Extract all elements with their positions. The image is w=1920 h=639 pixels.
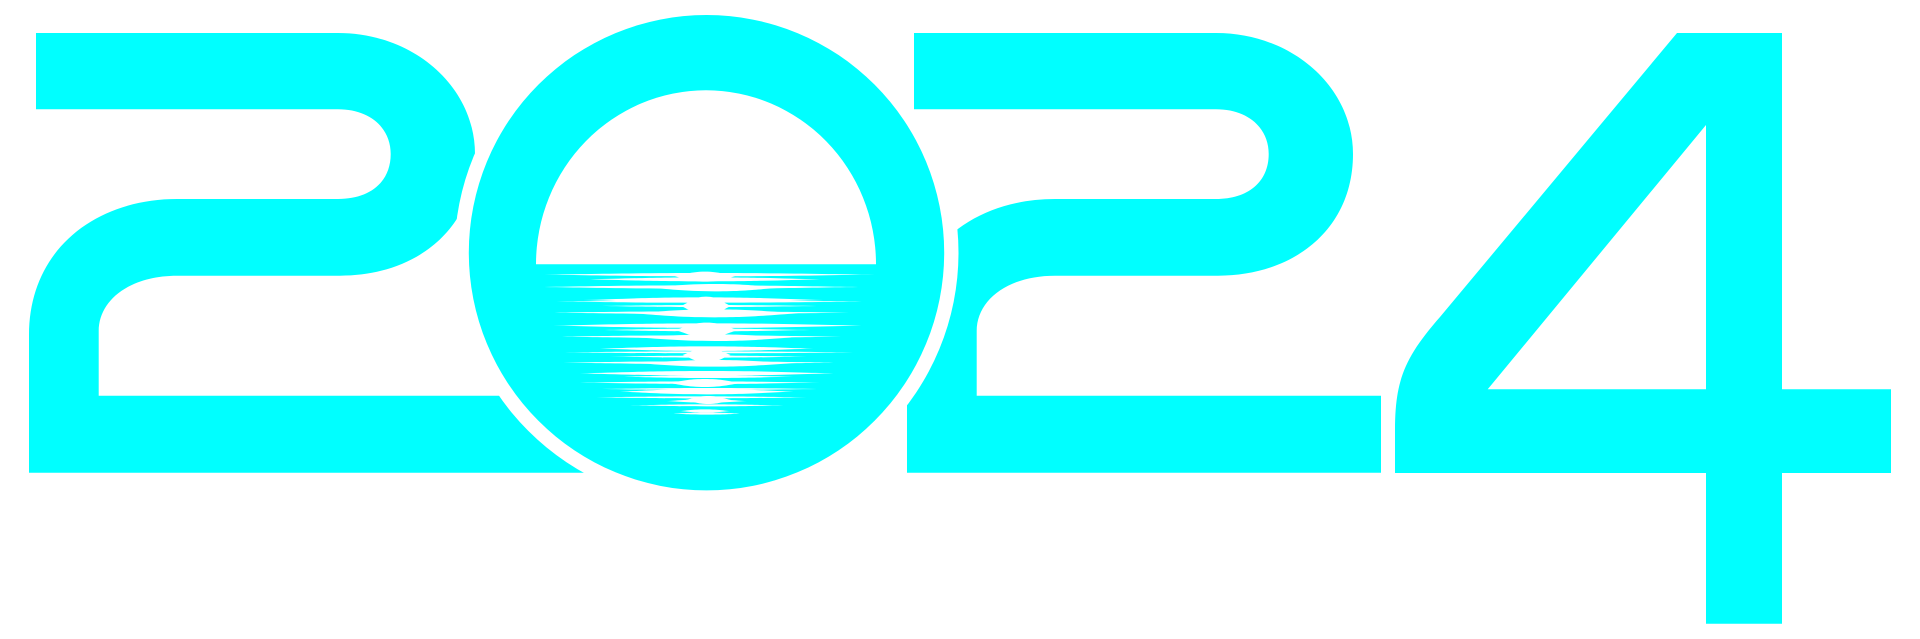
digit: second 2 [907,33,1381,473]
digit: 4 [1395,33,1891,624]
sky: white upper half of inner oval [536,90,876,264]
digit: first 2 [29,33,640,473]
disc: cyan circle [469,15,944,490]
water reflection: white tapered streaks [538,272,875,415]
digit: 0 as sun and water disc [469,15,944,490]
